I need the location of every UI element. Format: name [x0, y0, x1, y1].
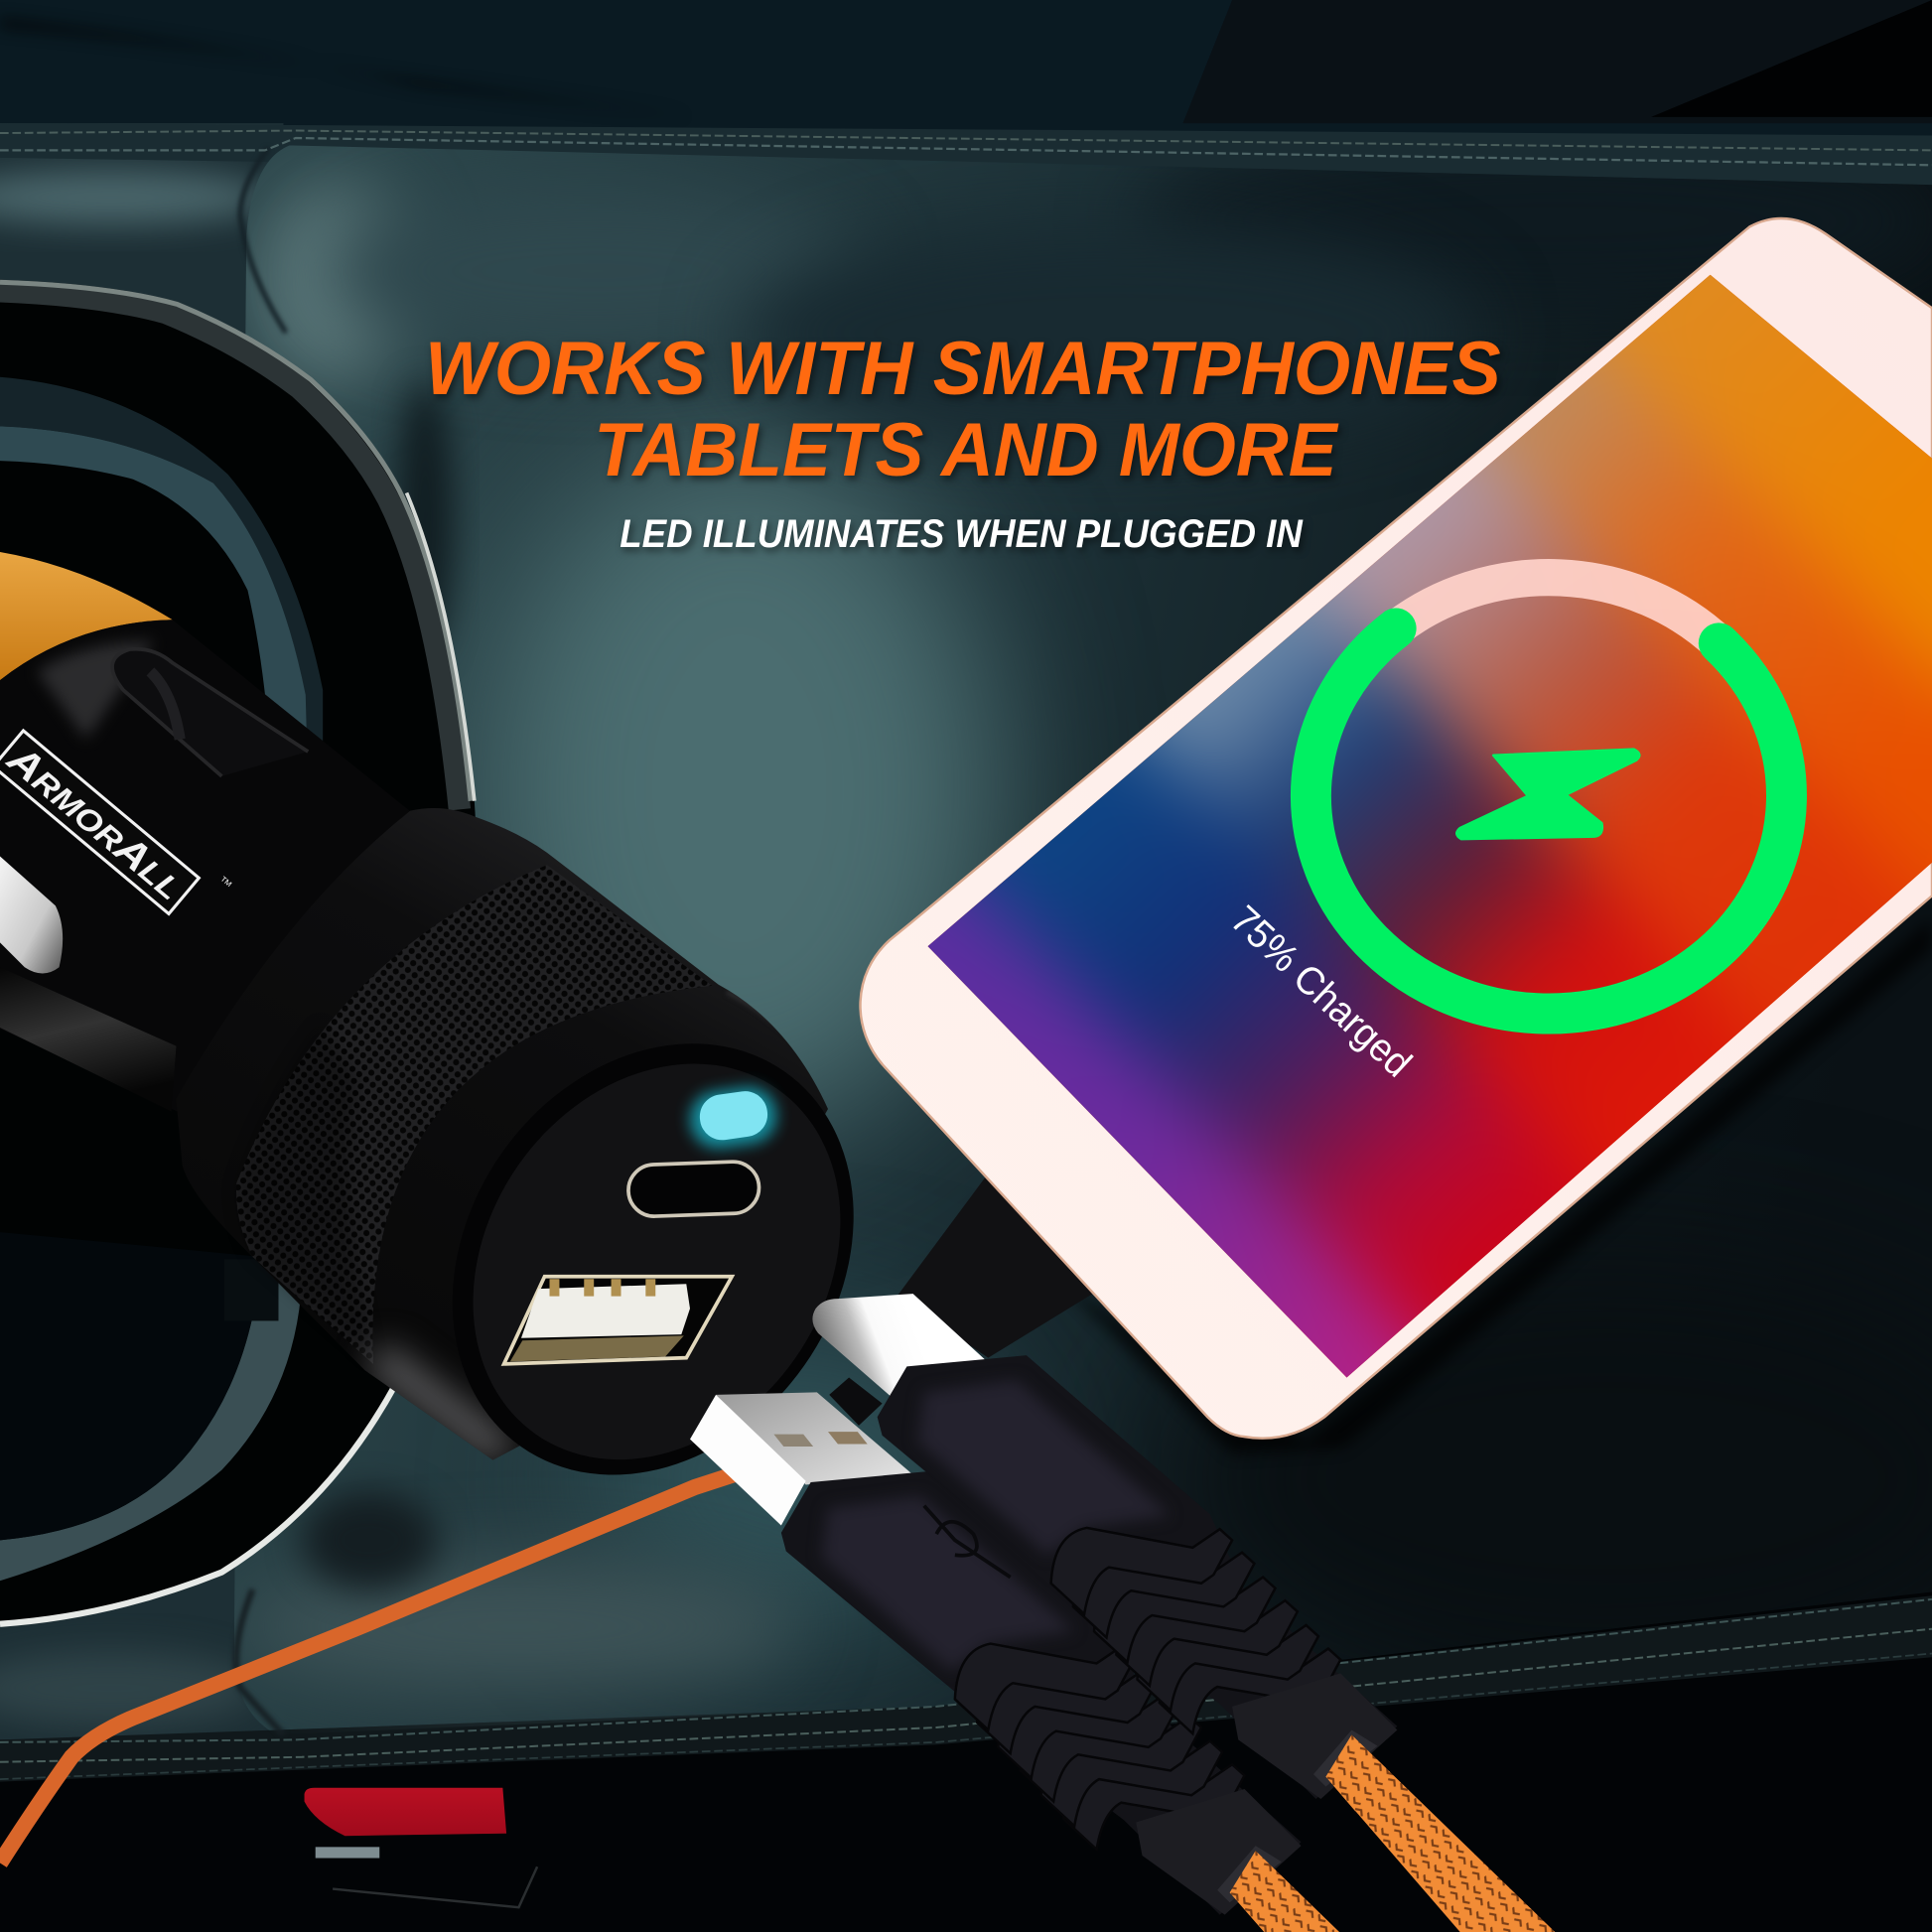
lower inner ring: [0, 1257, 302, 1581]
chrome rim upper: [0, 291, 460, 809]
barrel underside strip: [0, 967, 176, 1111]
battery ring remainder: [1396, 578, 1719, 643]
heading: [425, 327, 1501, 492]
car charger: [0, 552, 936, 1553]
red hazard button: [305, 1788, 537, 1907]
phone body: [861, 218, 1932, 1439]
lightning bolt icon: [1456, 750, 1639, 839]
chrome rim lower: [0, 1378, 399, 1624]
subheading: LED ILLUMINATES WHEN PLUGGED IN: [620, 512, 1304, 556]
top dark band and seat: [0, 0, 1932, 136]
charge label: 75% Charged: [1222, 897, 1420, 1086]
barrel highlight: [37, 640, 154, 740]
phone screen: [927, 274, 1932, 1378]
face plate: [370, 966, 936, 1553]
knurled grip: [236, 865, 712, 1364]
orange rear band: [0, 552, 173, 680]
LED: [687, 1083, 780, 1152]
charging cable in phone: [897, 1176, 1097, 1358]
USB-A plug: [690, 1392, 911, 1525]
panel groove bottom: [236, 1589, 283, 1734]
heading line 1: WORKS WITH SMARTPHONES: [425, 327, 1501, 411]
panel groove top: [240, 148, 286, 333]
USB symbol on lower boot: [924, 1506, 1011, 1578]
charger barrel: [0, 620, 413, 1115]
inner teal band: [0, 426, 308, 788]
console leather: [232, 145, 1932, 1730]
charger body: [176, 808, 828, 1460]
grip shading: [236, 1023, 376, 1364]
USB-A port: [504, 1277, 732, 1364]
barrel slot: [112, 649, 308, 776]
orange thin cable: [0, 1468, 752, 1863]
battery ring progress: [1311, 628, 1786, 1014]
trademark: ™: [215, 873, 235, 894]
upper cable boot and braid: [878, 1355, 1555, 1932]
metal contact: [0, 857, 63, 973]
brand logo: ARMORALL: [0, 737, 192, 908]
lower cable boot and braid: [781, 1471, 1339, 1932]
inner dark band: [0, 377, 323, 788]
USB-C port: [627, 1161, 759, 1217]
air vent with chrome rim: [0, 280, 492, 1624]
front band sheen: [376, 992, 813, 1453]
smartphone: [859, 216, 1932, 1453]
heading line 2: TABLETS AND MORE: [594, 408, 1339, 492]
phone shadow: [1059, 918, 1932, 1453]
left trim panel: [0, 123, 283, 1739]
USB-C plug: [812, 1294, 986, 1426]
bottom seam strip: [0, 1595, 1932, 1782]
top seam strip: [0, 123, 1932, 188]
